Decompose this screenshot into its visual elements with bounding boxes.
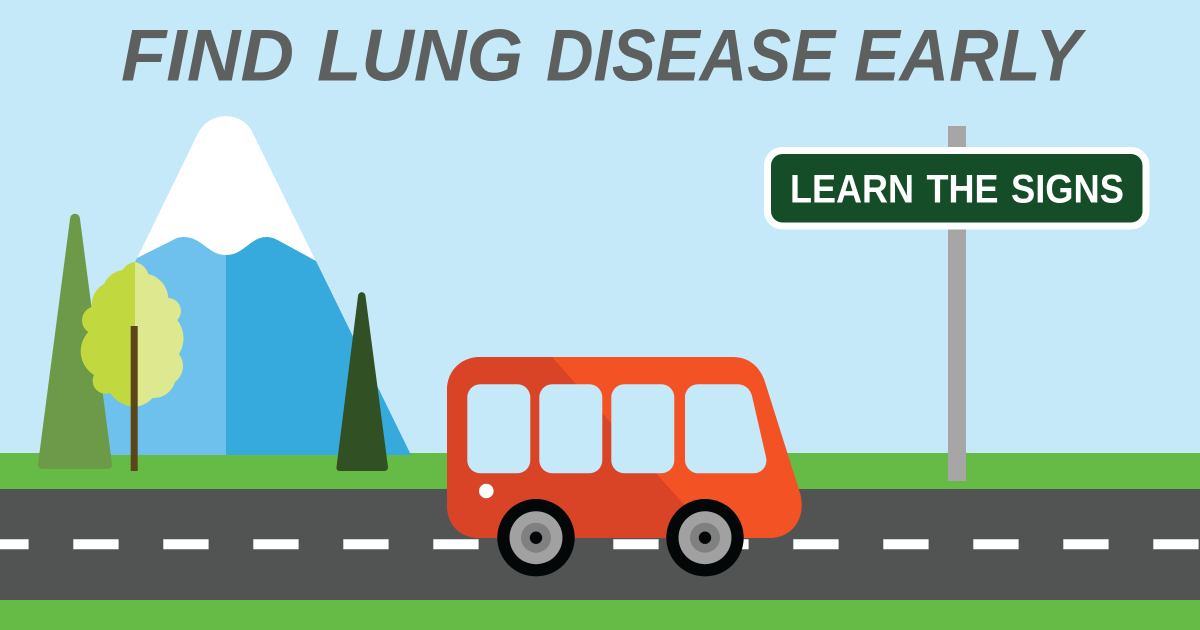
title: FIND (121, 15, 294, 96)
grass (0, 453, 1200, 630)
tall green tree (38, 214, 112, 469)
road (0, 489, 1200, 600)
round tree (81, 262, 183, 471)
bus body (447, 357, 802, 538)
sign board (768, 150, 1146, 226)
title: DISEASE (546, 15, 837, 96)
mountain (42, 116, 411, 455)
sign text: THE (926, 167, 998, 211)
sign text: LEARN (790, 167, 914, 211)
wheel left (497, 499, 575, 576)
wheel right (666, 499, 744, 576)
bus (447, 357, 802, 576)
headlight (479, 484, 494, 498)
title: LUNG (317, 15, 523, 96)
windows (467, 384, 766, 473)
sign text: SIGNS (1011, 167, 1124, 211)
sign post (948, 126, 966, 481)
dark green tree (336, 292, 388, 471)
sign (768, 126, 1146, 481)
title: EARLY (854, 15, 1087, 96)
title (121, 15, 1087, 96)
sign text (790, 167, 1124, 211)
